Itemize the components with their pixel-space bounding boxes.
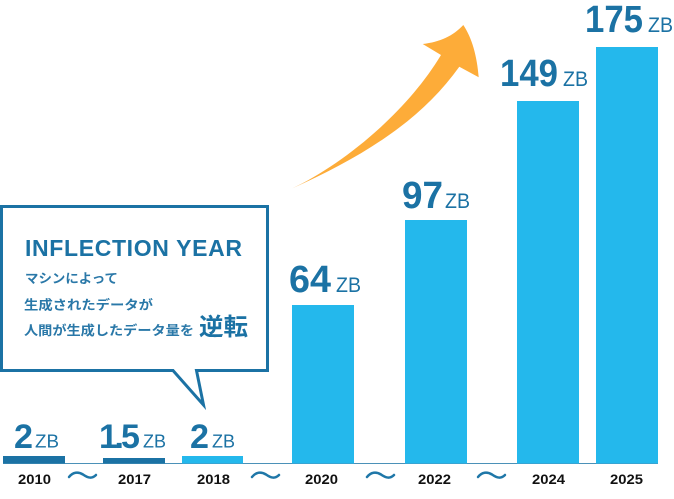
callout: inflection year [2, 206, 268, 405]
bar 2024: 149 [500, 53, 558, 95]
bar 2010: ZB [35, 432, 59, 452]
bar 2018: 2018 [197, 471, 230, 487]
bar 2017: ZB [143, 432, 166, 452]
growth arrow [292, 25, 479, 188]
bar 2022 [402, 175, 470, 487]
callout body text: 生成されたデータが [24, 298, 153, 312]
callout body text [24, 271, 248, 341]
bar 2025: 2025 [610, 471, 643, 487]
bar 2018: ZB [212, 432, 235, 452]
bar 2017: 2017 [118, 471, 151, 487]
bar 2022: ZB [445, 190, 470, 213]
bar 2018 [182, 418, 243, 487]
bar 2018: 2 [190, 418, 209, 456]
bar 2020: 64 [289, 259, 331, 301]
bar 2020: ZB [336, 274, 361, 297]
bar 2010: 2 [14, 418, 33, 456]
bar 2010: 2010 [18, 471, 51, 487]
tilde separators [69, 473, 505, 478]
bar 2024: 2024 [532, 471, 565, 487]
callout body text: 逆転 [199, 314, 248, 341]
bar 2022: 2022 [418, 471, 451, 487]
bar 2017: 1.5 [99, 418, 140, 456]
bar 2017 [99, 418, 166, 487]
callout body text: マシンによって [25, 271, 118, 286]
bar 2022: 97 [402, 175, 443, 217]
callout heading: INFLECTION YEAR [25, 235, 242, 261]
bar 2024: ZB [563, 68, 588, 91]
bar 2010 [3, 418, 65, 487]
bar 2025: 175 [585, 0, 643, 41]
bar 2020: 2020 [305, 471, 338, 487]
bar 2024 [500, 53, 588, 487]
callout body text: 人間が生成したデータ量を [24, 323, 194, 338]
bar 2025 [585, 0, 673, 487]
bar 2020 [289, 259, 361, 487]
